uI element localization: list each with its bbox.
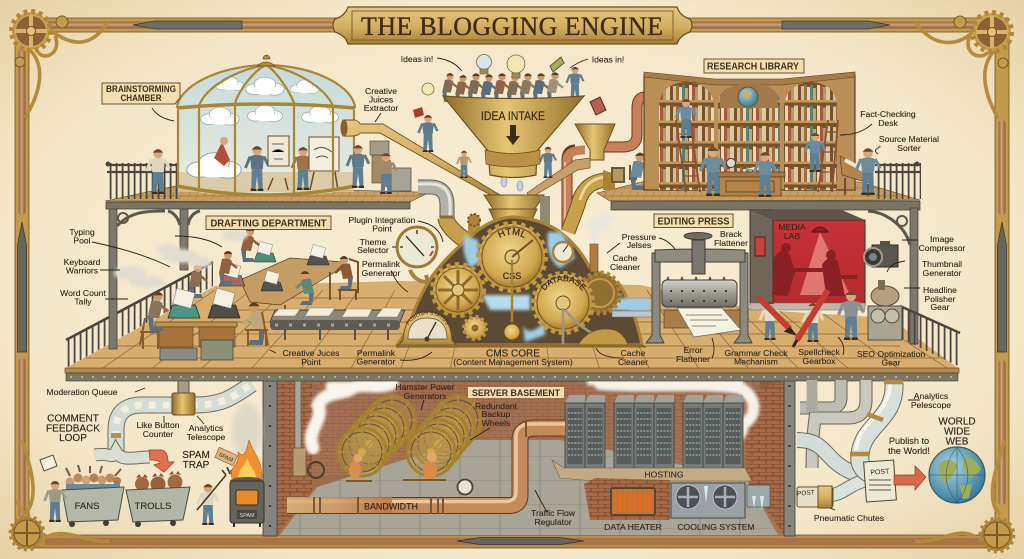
base plate (397, 345, 646, 347)
label: server basement: SERVER BASEMENT (472, 388, 560, 399)
callout labels: Source Material (879, 134, 939, 144)
callout labels: (Content Management System) (453, 357, 573, 367)
corner: bottom left (11, 440, 110, 549)
lower glass pipes (797, 440, 880, 495)
label: research library: RESEARCH LIBRARY (707, 62, 799, 73)
publish arrow (894, 466, 926, 490)
painter two (292, 147, 314, 190)
drafting department (114, 216, 405, 360)
copper feed pipes (565, 97, 652, 230)
callout labels: SEO Optimization (857, 349, 925, 359)
trolls bin (126, 487, 190, 527)
label: editing press: EDITING PRESS (658, 217, 730, 228)
title plaque (333, 7, 692, 44)
callout labels: Keyboard (64, 257, 101, 267)
creative juices chute (340, 120, 502, 198)
small gauge (553, 242, 573, 262)
post document (864, 460, 896, 502)
callout labels: Headline (923, 285, 957, 295)
comment feedback loop (40, 380, 264, 527)
callout labels: Spellcheck (798, 347, 840, 357)
teal back typewriter (254, 241, 276, 262)
html css gear (476, 221, 548, 293)
callout labels: Juices (369, 94, 393, 104)
support columns (263, 378, 795, 536)
callout labels: Hamster Power (395, 382, 455, 392)
callout labels: Telescope (187, 432, 226, 442)
publish status gauge: PUBLISH STATUS (406, 310, 449, 325)
callout labels: Generators (404, 391, 446, 401)
lab workers (772, 243, 857, 296)
world globe (929, 447, 985, 503)
steam right (590, 382, 754, 458)
callout labels: Warriors (66, 266, 98, 276)
typewriter box under desk (160, 340, 233, 360)
vertical steam pipe (293, 380, 324, 478)
cms core engine (394, 196, 652, 348)
left railing and columns (66, 208, 213, 368)
juices extractor machine (370, 141, 411, 194)
right chute with climber (527, 147, 590, 198)
callout labels: Theme (360, 237, 387, 247)
cache cleaner mechanism (578, 329, 628, 345)
falling red book (590, 97, 606, 115)
callout labels: Grammar Check (724, 348, 788, 358)
dome frame (177, 65, 355, 195)
title: THE BLOGGING ENGINE (361, 12, 663, 41)
main floor (65, 281, 959, 381)
pen: bottom (457, 538, 584, 544)
editing press (612, 232, 752, 343)
callout labels: Cleaner (618, 357, 648, 367)
corner: top left (12, 12, 108, 118)
callout labels: Creative Juces (283, 348, 339, 358)
sorter worker (856, 148, 880, 195)
pen: right (998, 222, 1006, 352)
callout labels: Fact-Checking (860, 109, 916, 119)
callout labels: Flattener (714, 238, 748, 248)
callout labels: Traffic Flow (531, 508, 576, 518)
engine housing (397, 217, 642, 345)
ladder right (818, 120, 838, 192)
callout labels: Generator (923, 268, 961, 278)
callout labels: Flattener (676, 354, 710, 364)
floor beam (65, 368, 959, 381)
callout labels: the World! (888, 446, 930, 456)
post tube (797, 486, 833, 508)
spellcheck pencil (793, 290, 828, 347)
leader arrows (92, 58, 920, 512)
callout labels: Ideas in! (401, 54, 433, 64)
callout labels: Point (301, 357, 321, 367)
callout labels: Cache (613, 253, 638, 263)
callout labels: FEEDBACK (46, 424, 100, 434)
grammar pencil (758, 297, 793, 340)
basement floor (280, 440, 778, 535)
upper right railing (875, 162, 921, 199)
pen: top left (133, 21, 242, 29)
output pipes (797, 380, 985, 508)
data heater (584, 478, 670, 520)
shelves left (659, 82, 715, 190)
globe (720, 84, 778, 108)
teal typewriter front (168, 288, 200, 318)
callout labels: Cache (621, 348, 646, 358)
blue energy (463, 232, 650, 342)
conveyor belt (270, 308, 405, 340)
brass right pipe (568, 170, 615, 232)
fans crowd (66, 465, 121, 492)
pen: left (18, 222, 26, 352)
section labels (102, 59, 804, 399)
callout labels: Analytics (189, 423, 223, 433)
painter one (246, 146, 268, 191)
front left typist (148, 292, 168, 331)
callout labels: Extractor (364, 103, 398, 113)
dark typewriter centre (261, 270, 283, 291)
chair right (338, 259, 358, 300)
right worker at juice pipe (347, 145, 369, 188)
falling ideas (501, 177, 523, 191)
callout labels: Generator (357, 356, 395, 366)
flying book (550, 57, 564, 72)
clouds (187, 77, 338, 178)
crowd on funnel (442, 67, 584, 105)
callout labels: Gearbox (803, 356, 836, 366)
callout labels: Wheels (482, 418, 510, 428)
upper left platform (105, 162, 428, 209)
callout labels: Compressor (919, 243, 966, 253)
callout labels: Permalink (362, 259, 401, 269)
media lab label: MEDIA (778, 222, 806, 232)
bandwidth label: BANDWIDTH (364, 502, 418, 512)
callout labels: Like Button (136, 420, 180, 430)
callout labels: Image (930, 234, 954, 244)
callout labels: Redundant (475, 401, 518, 411)
light bulbs (422, 54, 525, 95)
intake label: IDEA INTAKE (481, 111, 545, 123)
callout labels: Mechanism (734, 356, 778, 366)
piston rod (504, 260, 520, 340)
chairs (140, 312, 268, 349)
right column (868, 208, 918, 344)
ladder left (676, 120, 700, 192)
spam furnace: SPAM (239, 513, 255, 519)
spiked roller (662, 276, 737, 307)
html css gear: CSS (503, 271, 521, 281)
pink typewriter (219, 262, 245, 286)
hamster wheels 1 (338, 396, 416, 476)
press frame (646, 232, 752, 343)
idea intake funnel (443, 96, 584, 178)
callout labels: WIDE (944, 426, 970, 438)
research library (644, 72, 880, 197)
callout labels: Backup (482, 409, 511, 419)
left pressure gauge (397, 227, 437, 282)
hamster 2 (403, 452, 446, 480)
callout labels: Cleaner (610, 262, 640, 272)
spam note (215, 447, 238, 466)
callout labels: Gear (881, 358, 901, 368)
callout labels: Regulator (534, 517, 572, 527)
librarian on left ladder (676, 99, 696, 138)
envelope figure (40, 455, 66, 522)
comment pipe (95, 380, 252, 458)
bandwidth pipe (287, 421, 565, 514)
farmer with pitchfork (197, 467, 232, 525)
shelves right (784, 82, 838, 190)
conveyor out (612, 311, 652, 317)
camera (864, 241, 898, 267)
publish status gauge (396, 310, 459, 348)
callout labels: Point (372, 224, 392, 234)
dark typewriter front (208, 288, 240, 318)
upper right platform (597, 162, 921, 210)
html css gear: HTML (498, 228, 524, 238)
callout labels: COOLING SYSTEM (677, 522, 755, 532)
callout labels: DATA HEATER (604, 522, 662, 532)
front right typist (243, 302, 265, 345)
callout labels: Publish to (889, 436, 929, 446)
callout labels: SPAM (182, 450, 210, 461)
drafting steam (114, 229, 248, 288)
flying thinker (214, 137, 230, 166)
brass connector pipe (440, 217, 468, 242)
top collar (489, 209, 537, 222)
corner: top right (915, 13, 1011, 118)
grey manifold pipes (800, 380, 866, 468)
callout labels: LOOP (59, 433, 87, 444)
brainstorming chamber (177, 55, 355, 196)
steam left (311, 383, 392, 448)
upper left railing (106, 162, 178, 199)
plumbing worker (612, 153, 650, 190)
corner: bottom right (915, 440, 1013, 551)
steam vent (586, 212, 615, 272)
callout labels: Brack (720, 229, 743, 239)
callout labels: CMS CORE (486, 348, 540, 360)
callout labels: Counter (143, 429, 173, 439)
callout labels: Sorter (897, 143, 921, 153)
hosting platform (552, 460, 752, 481)
post tube: POST (797, 489, 815, 498)
trolls crowd (135, 471, 182, 492)
side valves (468, 196, 550, 234)
easel one (268, 136, 289, 190)
small funnel (575, 124, 615, 160)
desk (715, 166, 785, 196)
callout labels: WORLD (938, 416, 976, 428)
shelves centre (718, 84, 780, 172)
callout labels: Generator (362, 268, 400, 278)
callout labels: COMMENT (47, 414, 99, 424)
librarian on right ladder (805, 133, 825, 172)
callout labels: Plugin Integration (349, 215, 416, 225)
media lab (750, 210, 865, 310)
callout labels: Pelescope (911, 400, 951, 410)
researchers (700, 147, 776, 197)
post document: POST (870, 468, 890, 477)
callout labels: Selector (357, 245, 389, 255)
media lab: LAB (784, 231, 800, 241)
callout labels: Analytics (914, 391, 948, 401)
smoke (232, 403, 262, 457)
spam furnace (230, 440, 264, 527)
woman with red book (413, 107, 438, 152)
seo worker (838, 291, 864, 340)
callout labels: Jelses (627, 240, 651, 250)
callout labels: Ideas in! (592, 54, 624, 64)
database gear: DATABASE (540, 275, 586, 291)
callout labels: Pneumatic Chutes (814, 513, 884, 523)
callout labels: Desk (878, 118, 898, 128)
server basement (263, 378, 795, 536)
press bed (664, 310, 740, 328)
callout labels: Creative (365, 86, 397, 96)
back desks (240, 258, 345, 317)
back gear (580, 273, 620, 313)
callout labels: Tally (74, 296, 92, 306)
cooling system (671, 483, 770, 518)
polisher machine (868, 280, 902, 340)
callout labels: Gear (930, 302, 950, 312)
hamster 1 (346, 454, 372, 481)
label: brainstorming chamber (102, 83, 180, 104)
callout labels: Moderation Queue (46, 387, 118, 397)
label: brainstorming chamber: CHAMBER (120, 93, 162, 103)
back workers (189, 228, 353, 305)
hamster wheels 2 (407, 396, 482, 476)
lower collar funnel (484, 195, 544, 212)
front desks (155, 322, 237, 347)
fans bin (62, 487, 124, 527)
spam note: SPAM (217, 452, 234, 464)
silver elbow pipe (418, 184, 450, 218)
pen: top right (782, 21, 890, 29)
callout labels (46, 54, 976, 532)
drafting label box: DRAFTING DEPARTMENT (210, 219, 326, 230)
chute climber (457, 151, 471, 178)
callout labels: Polisher (924, 294, 956, 304)
trolls label: TROLLS (135, 501, 171, 512)
callout labels: TRAP (183, 460, 210, 471)
callout labels: Thumbnail (922, 259, 962, 269)
red arrow (149, 450, 174, 472)
callout labels: Permalink (357, 348, 396, 358)
callout labels: Pool (73, 236, 91, 246)
down arrow (506, 125, 520, 145)
fans label: FANS (75, 501, 99, 512)
callout labels: Word Count (60, 288, 106, 298)
left gear (433, 265, 483, 315)
callout labels: WEB (946, 436, 969, 448)
conveyor strip (750, 303, 865, 310)
small gear (464, 317, 486, 339)
easel two (309, 137, 339, 190)
right railing (900, 306, 960, 366)
callout labels: Pressure (622, 232, 656, 242)
label: brainstorming chamber: BRAINSTORMING (106, 84, 176, 94)
printed page (677, 308, 741, 337)
database gear (531, 271, 595, 345)
callout labels: Typing (69, 227, 95, 237)
hosting label: HOSTING (644, 470, 684, 480)
fact check desk (840, 156, 872, 196)
dark typewriter back (307, 244, 329, 265)
server racks (565, 395, 743, 469)
telescope pipe (850, 382, 903, 478)
reader on left balcony (146, 149, 170, 194)
callout labels: Error (683, 345, 703, 355)
